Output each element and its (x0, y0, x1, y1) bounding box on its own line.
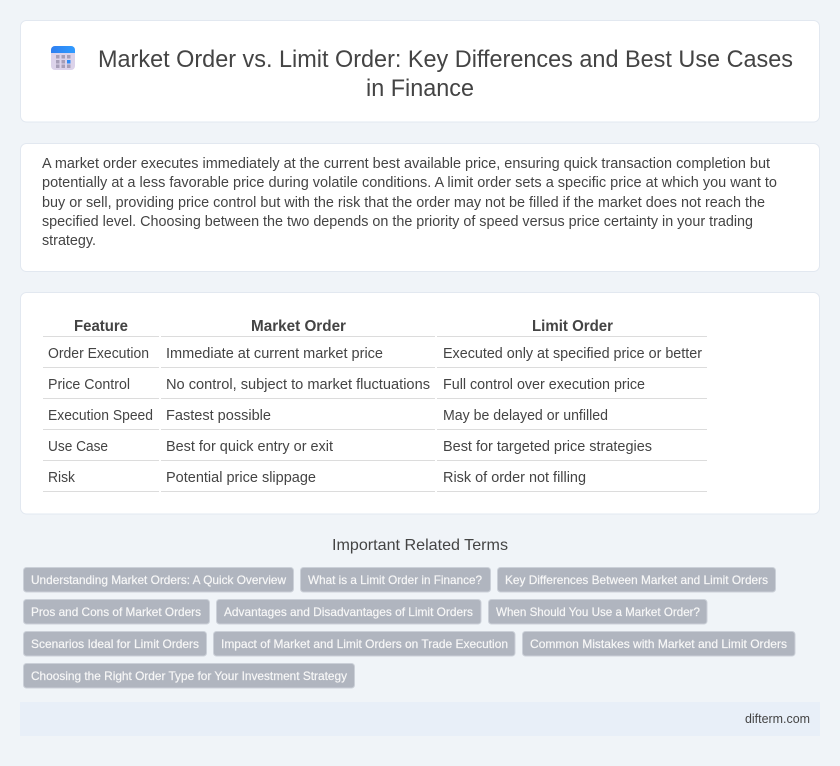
tag (216, 600, 481, 624)
row: order execution: Order Execution (48, 346, 149, 362)
panel: comparison table (20, 292, 820, 514)
footer: difterm.com (745, 711, 810, 726)
description text (42, 156, 777, 249)
row: risk: Risk of order not filling (443, 470, 586, 486)
title: in Finance (366, 75, 474, 102)
row: order execution: Executed only at specified price or better (443, 346, 702, 362)
tag (300, 568, 490, 592)
description text: strategy. (42, 233, 96, 249)
description text: potentially at a less favorable price during volatile conditions. A limit order sets a specific price at which you want to (42, 175, 777, 191)
row: execution speed: Execution Speed (48, 408, 153, 424)
row: execution speed (48, 408, 608, 424)
description text: buy or sell, providing price control but with the risk that the order may not be filled if the market does not reach the (42, 195, 765, 211)
tag: Pros and Cons of Market Orders (31, 605, 201, 619)
row: use case: Use Case (48, 439, 108, 455)
table header: Market Order (251, 318, 346, 335)
row: execution speed: May be delayed or unfilled (443, 408, 608, 424)
tag: Scenarios Ideal for Limit Orders (31, 637, 199, 651)
panel: description (20, 144, 820, 272)
table header: Limit Order (532, 318, 613, 335)
heading: related terms: Important Related Terms (332, 537, 508, 554)
tag: What is a Limit Order in Finance? (308, 573, 482, 587)
footer (20, 702, 820, 736)
row: risk: Risk (48, 470, 76, 486)
row: use case (48, 439, 652, 455)
table header: Feature (74, 318, 128, 335)
tag (24, 632, 206, 656)
tag (214, 632, 515, 656)
row: risk: Potential price slippage (166, 470, 316, 486)
panel: title card (20, 20, 820, 122)
tag (24, 600, 210, 624)
tag: Key Differences Between Market and Limit Orders (505, 573, 768, 587)
row: order execution: Immediate at current market price (166, 346, 383, 362)
tag: Impact of Market and Limit Orders on Trade Execution (221, 637, 508, 651)
icon: calendar (51, 46, 75, 70)
table header (74, 318, 613, 335)
related term tags (24, 568, 795, 688)
row: execution speed: Fastest possible (166, 408, 271, 424)
row: price control: Price Control (48, 377, 130, 393)
tag (24, 568, 294, 592)
row: use case: Best for targeted price strategies (443, 439, 652, 455)
title (98, 46, 793, 102)
row: price control: No control, subject to market fluctuations (166, 377, 430, 393)
description text: specified level. Choosing between the two depends on the priority of speed versus price certainty in your trading (42, 214, 753, 230)
tag: Advantages and Disadvantages of Limit Orders (224, 605, 473, 619)
tag (24, 664, 354, 688)
tag: When Should You Use a Market Order? (496, 605, 700, 619)
row: use case: Best for quick entry or exit (166, 439, 333, 455)
row: order execution (48, 346, 702, 362)
title: Market Order vs. Limit Order: Key Differences and Best Use Cases (98, 46, 793, 73)
tag: Choosing the Right Order Type for Your Investment Strategy (31, 669, 347, 683)
row: price control: Full control over execution price (443, 377, 645, 393)
tag (498, 568, 776, 592)
tag: Understanding Market Orders: A Quick Overview (31, 573, 286, 587)
tag (522, 632, 795, 656)
tag (488, 600, 707, 624)
tag: Common Mistakes with Market and Limit Orders (530, 637, 787, 651)
row: risk (48, 470, 586, 486)
description text: A market order executes immediately at the current best available price, ensuring quick transaction completion but (42, 156, 770, 172)
row: price control (48, 377, 645, 393)
